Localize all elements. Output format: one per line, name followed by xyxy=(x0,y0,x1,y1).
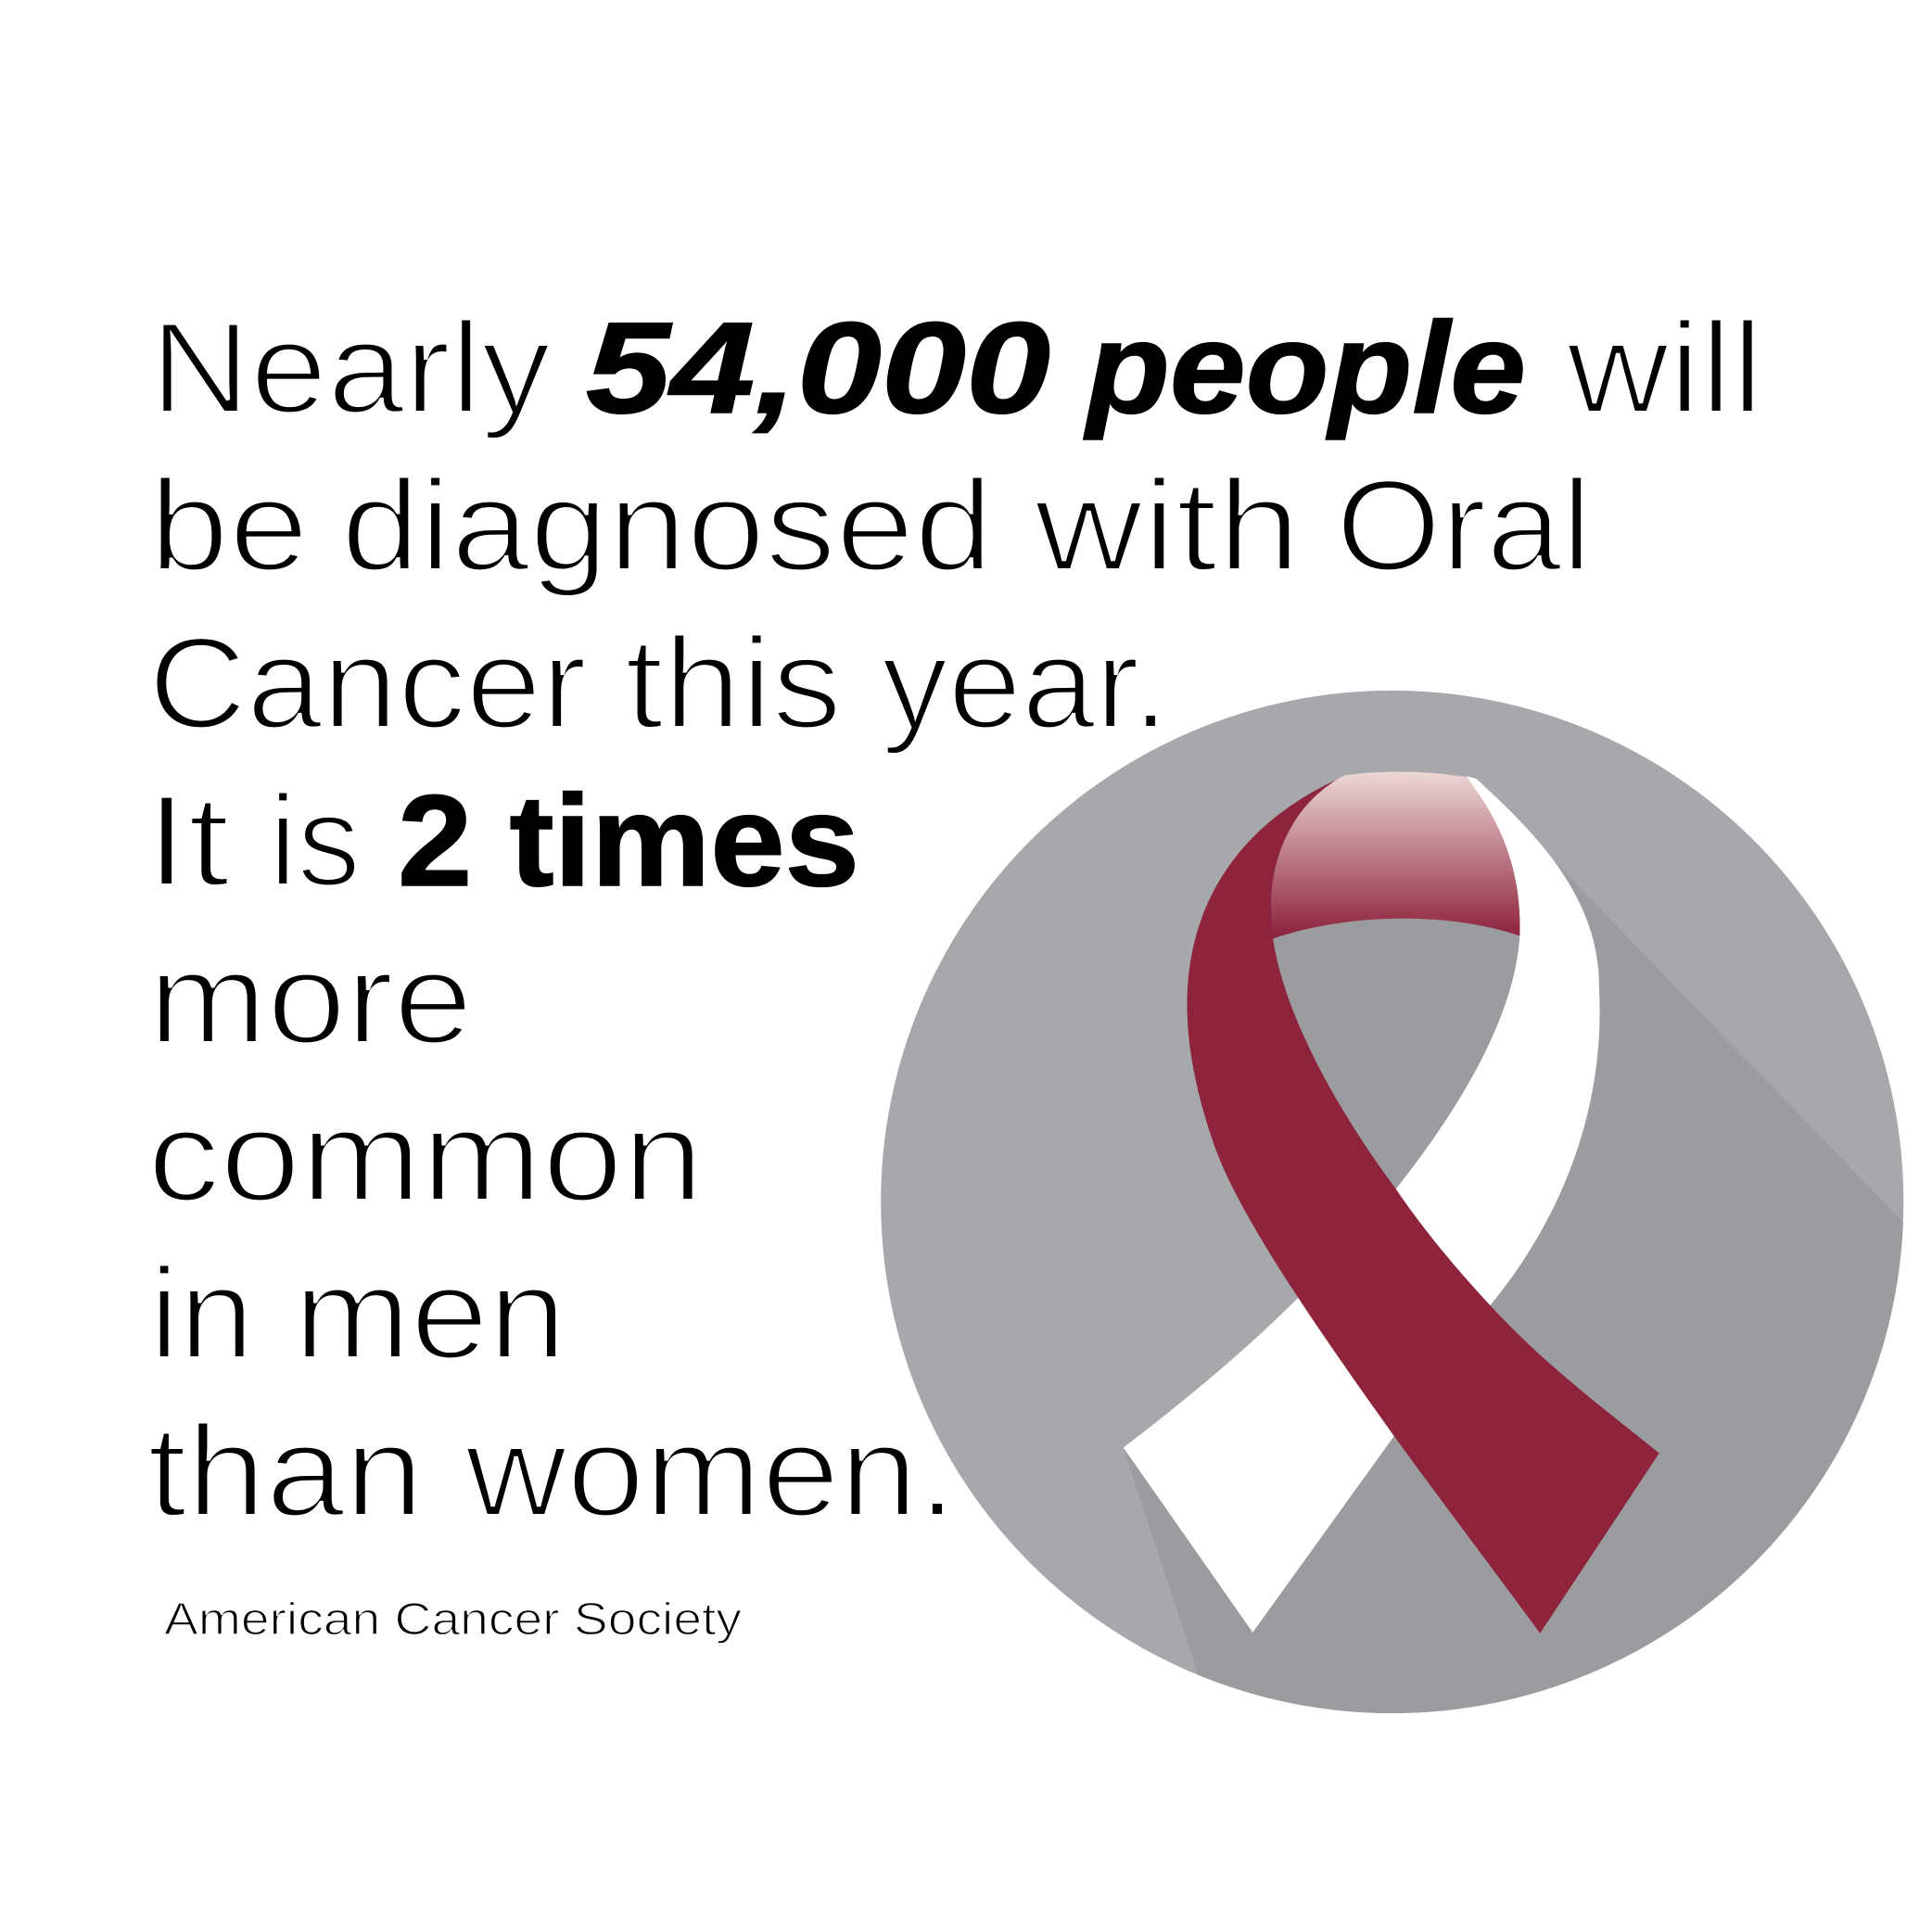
line 4: is xyxy=(269,768,361,913)
line 4: 2 times xyxy=(398,768,859,913)
ribbon gradient fold xyxy=(1271,772,1519,938)
line 8: than xyxy=(147,1398,424,1544)
statement text xyxy=(146,295,1763,1544)
loop interior shade xyxy=(1238,910,1543,1201)
ribbon white tail xyxy=(1124,1275,1414,1633)
line 2 xyxy=(149,452,1592,598)
ribbon red band xyxy=(1188,776,1659,1633)
line 5: more xyxy=(148,925,473,1071)
ribbon white band xyxy=(1377,776,1600,1312)
line 3: this xyxy=(625,610,842,756)
circle background xyxy=(881,691,1903,1713)
line 7: in xyxy=(149,1240,254,1386)
line 1: people xyxy=(1083,295,1526,440)
line 1 xyxy=(150,295,1763,440)
line 3: Cancer xyxy=(148,610,587,756)
line 2: with xyxy=(1034,452,1301,598)
line 7: men xyxy=(294,1240,566,1386)
line 1: will xyxy=(1566,295,1763,440)
source credit: American Cancer Society xyxy=(164,1595,743,1645)
line 1: Nearly xyxy=(150,295,551,440)
long shadow xyxy=(1124,777,1903,1713)
line 3 xyxy=(148,610,1169,756)
line 3: year. xyxy=(882,610,1169,756)
line 6: common xyxy=(147,1083,704,1228)
line 1: 54,000 xyxy=(586,295,1050,440)
line 4: It xyxy=(146,768,230,913)
line 8: women. xyxy=(464,1398,957,1544)
icon: awareness ribbon in circle xyxy=(881,690,1904,1713)
line 2: diagnosed xyxy=(341,452,993,598)
line 2: Oral xyxy=(1336,452,1592,598)
line 7 xyxy=(149,1240,566,1386)
line 4 xyxy=(146,768,859,913)
line 8 xyxy=(147,1398,957,1544)
line 2: be xyxy=(149,452,309,598)
